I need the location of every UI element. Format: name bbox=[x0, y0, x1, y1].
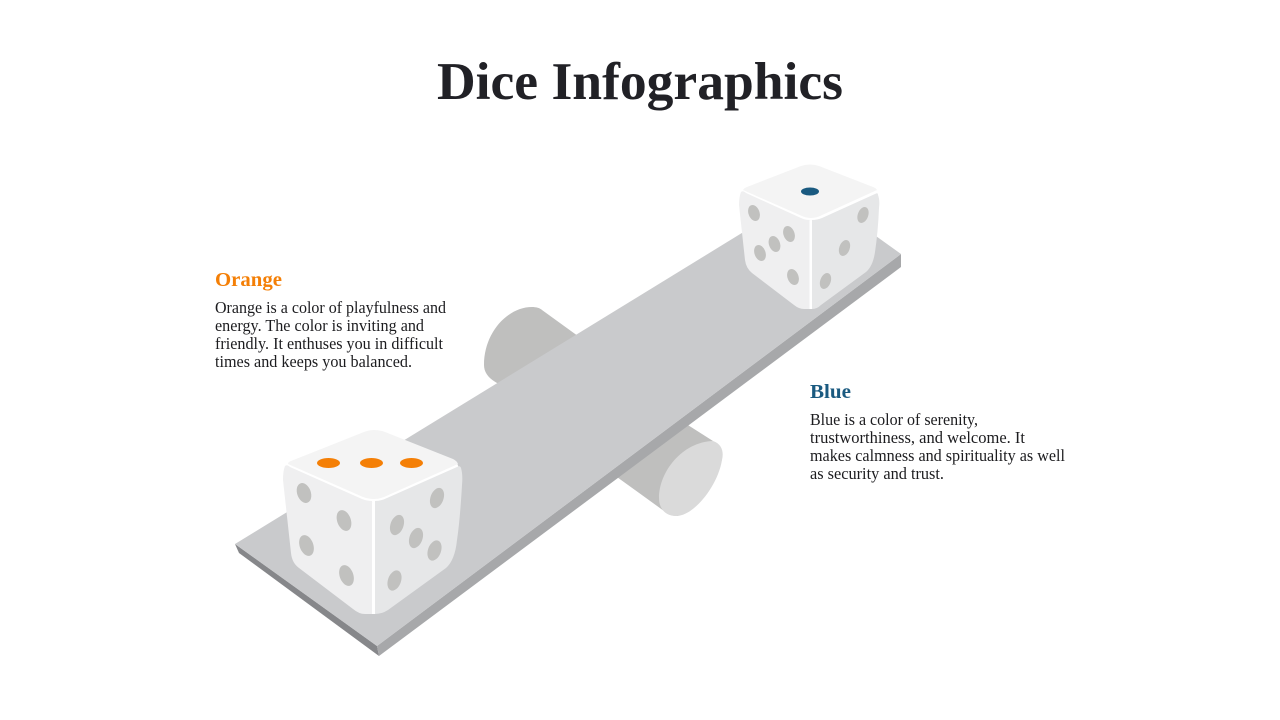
body: orange description: energy. The color is inviting and bbox=[215, 316, 425, 335]
body: blue description bbox=[810, 410, 1065, 483]
heading: blue: Blue bbox=[810, 381, 851, 403]
body: orange description: times and keeps you balanced. bbox=[215, 352, 412, 371]
cylinder pivot: front end bbox=[610, 420, 723, 516]
die right face bbox=[812, 193, 879, 309]
body: blue description: Blue is a color of serenity, bbox=[810, 410, 978, 429]
die: orange three bbox=[283, 430, 462, 614]
white seams between faces bbox=[289, 466, 458, 614]
die: blue one bbox=[739, 164, 879, 309]
body: blue description: makes calmness and spirituality as well bbox=[810, 446, 1065, 465]
die left face bbox=[739, 191, 810, 309]
left face pips bbox=[294, 481, 357, 588]
plank bbox=[235, 190, 901, 656]
body: orange description: Orange is a color of playfulness and bbox=[215, 298, 447, 317]
title: Dice Infographics bbox=[437, 53, 843, 111]
text block: blue bbox=[810, 381, 1065, 483]
heading: orange: Orange bbox=[215, 269, 282, 291]
body: blue description: as security and trust. bbox=[810, 464, 944, 483]
left face pips bbox=[746, 203, 801, 287]
body: orange description: friendly. It enthuses you in difficult bbox=[215, 334, 443, 353]
die top face bbox=[288, 430, 458, 499]
blue top pip bbox=[801, 188, 819, 196]
die left face bbox=[283, 465, 372, 614]
orange top pips bbox=[317, 458, 423, 468]
die right face bbox=[375, 466, 462, 614]
right face pips bbox=[385, 486, 447, 593]
cylinder pivot: back end bbox=[484, 307, 600, 400]
white seams between faces bbox=[743, 192, 876, 309]
body: orange description bbox=[215, 298, 447, 371]
right face pips bbox=[818, 205, 871, 291]
text block: orange bbox=[215, 269, 447, 371]
die top face bbox=[743, 164, 877, 218]
seesaw illustration bbox=[235, 164, 901, 656]
body: blue description: trustworthiness, and welcome. It bbox=[810, 428, 1025, 447]
